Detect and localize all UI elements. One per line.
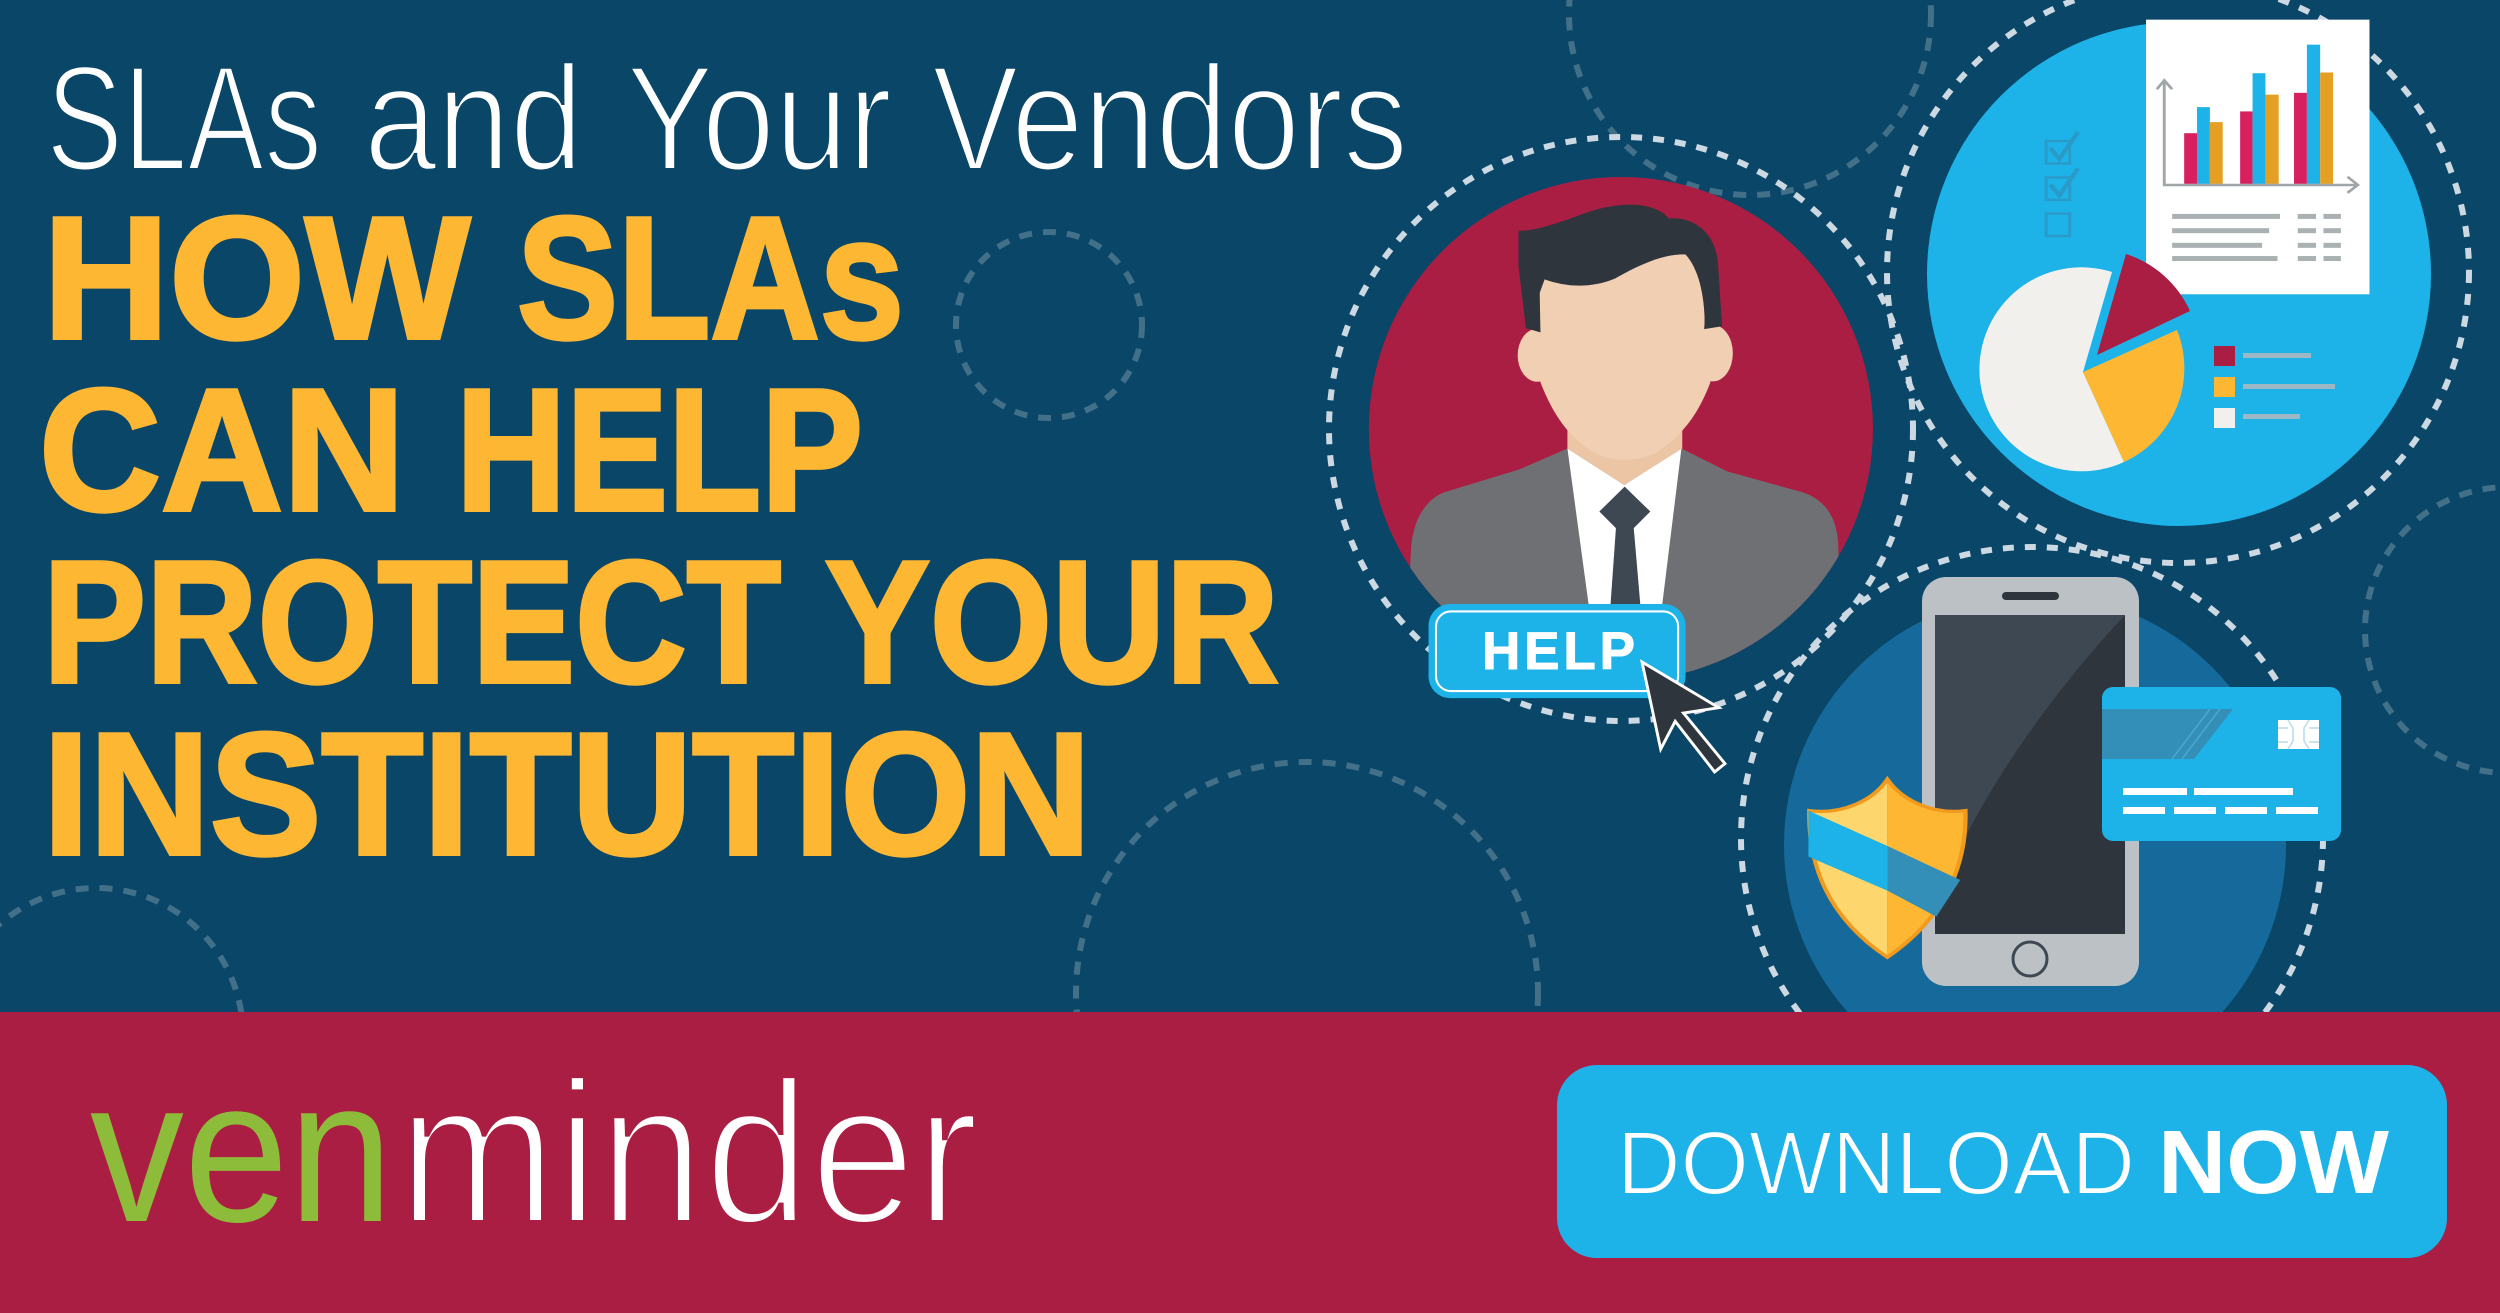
logo: venminder: minder xyxy=(398,1039,979,1267)
title: SLAs and Your Vendors: and xyxy=(364,34,583,202)
title: SLAs and Your Vendors xyxy=(46,34,1408,202)
help label: HELP xyxy=(1482,622,1635,681)
red circle xyxy=(1369,177,1873,681)
panel: charts and reports xyxy=(1927,20,2431,526)
report text lines xyxy=(2172,214,2341,261)
title: SLAs and Your Vendors: SLAs xyxy=(46,34,322,202)
button: download now: NOW xyxy=(2158,1113,2389,1213)
dashed ring: person xyxy=(1329,137,1913,721)
dashed ring: phone xyxy=(1741,547,2323,1129)
blue circle xyxy=(1927,22,2431,526)
title: SLAs and Your Vendors: Your xyxy=(626,34,892,202)
footer bar xyxy=(0,1012,2500,1313)
heading: How SLAs can help protect your institution: YOUR xyxy=(825,524,1279,719)
heading: How SLAs can help protect your institution: HOW xyxy=(43,180,471,375)
report document with bar chart xyxy=(2146,20,2369,294)
dark blue circle xyxy=(1784,594,2286,1096)
heading: How SLAs can help protect your institution: INSTITUTION xyxy=(43,696,1091,891)
logo: venminder xyxy=(90,1037,979,1267)
icon: mouse cursor xyxy=(1642,662,1725,772)
help button xyxy=(1429,604,1686,698)
icon: checklist xyxy=(2046,132,2078,236)
panel: phone, shield and card xyxy=(1784,577,2341,1096)
pie chart xyxy=(1979,254,2190,471)
heading: How SLAs can help protect your institution: SLAs xyxy=(517,180,904,375)
bar chart xyxy=(2157,45,2358,193)
pie legend xyxy=(2214,346,2335,428)
logo: venminder: ven xyxy=(90,1037,393,1265)
panel: person with help button xyxy=(1369,177,1873,698)
icon: credit card xyxy=(2102,687,2341,841)
dashed ring: charts xyxy=(1887,0,2469,563)
icon: smartphone xyxy=(1922,577,2139,986)
button: download now xyxy=(1557,1065,2447,1258)
button: download now: DOWNLOAD xyxy=(1617,1114,2135,1214)
heading: How SLAs can help protect your institution: PROTECT xyxy=(43,524,781,719)
heading: How SLAs can help protect your institution xyxy=(39,180,1279,891)
title: SLAs and Your Vendors: Vendors xyxy=(932,34,1408,202)
icon: shield xyxy=(1808,779,1965,957)
heading: How SLAs can help protect your institution: CAN xyxy=(39,352,405,547)
businessman xyxy=(1404,205,1843,689)
heading: How SLAs can help protect your institution: HELP xyxy=(456,352,863,547)
